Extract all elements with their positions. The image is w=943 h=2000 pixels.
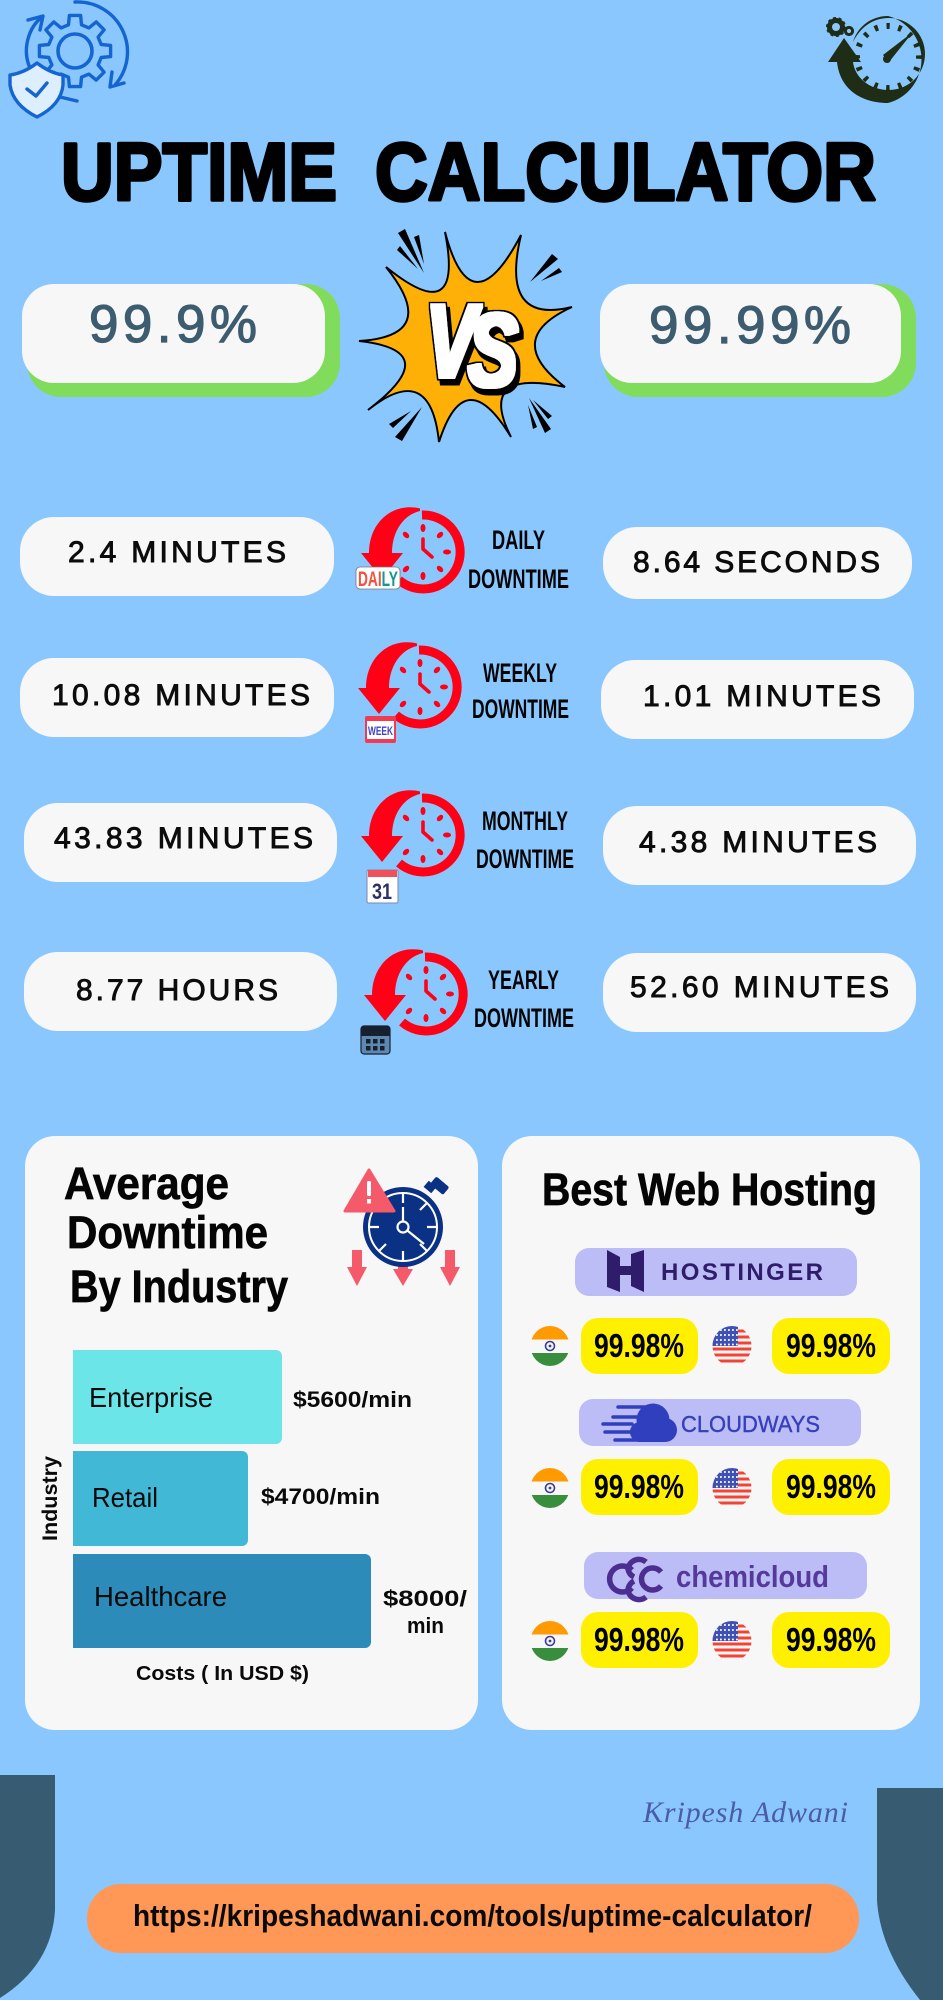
chip: india uptime: 99.98%	[594, 1468, 684, 1505]
panel: best web hosting	[502, 1136, 920, 1730]
logo: hostinger: HOSTINGER	[661, 1259, 823, 1286]
title: CALCULATOR	[375, 127, 876, 218]
label: monthly downtime: MONTHLY	[482, 806, 568, 836]
icon: weekly clock: WEEK	[368, 726, 394, 738]
label: yearly downtime: YEARLY	[488, 965, 559, 995]
chip: usa uptime: 99.98%	[786, 1468, 876, 1505]
icon: daily clock	[356, 507, 460, 591]
chip: usa uptime: 99.98%	[786, 1621, 876, 1658]
label: yearly downtime: DOWNTIME	[474, 1003, 574, 1033]
icon: VS burst	[359, 229, 572, 442]
icon: weekly clock	[358, 642, 457, 743]
chip: india uptime	[581, 1612, 698, 1668]
value: enterprise: $5600/min	[293, 1387, 412, 1412]
label: daily downtime: DAILY	[492, 525, 545, 555]
flag: india	[530, 1468, 570, 1508]
title: UPTIME	[61, 127, 337, 218]
row: daily downtime 99.9: 2.4 MINUTES	[68, 536, 286, 569]
label: monthly downtime: DOWNTIME	[476, 844, 574, 874]
bar chart	[39, 1350, 467, 1685]
bar: enterprise	[73, 1350, 282, 1444]
row: monthly downtime 99.99	[603, 806, 916, 885]
value: healthcare	[383, 1586, 467, 1638]
icon: monthly clock	[361, 790, 460, 904]
flag: india	[530, 1621, 570, 1661]
row: yearly downtime 99.9	[24, 952, 337, 1031]
logo: hostinger	[575, 1248, 857, 1296]
row: monthly downtime 99.9	[24, 803, 337, 882]
url button: https://kripeshadwani.com/tools/uptime-calculator/	[133, 1898, 812, 1933]
icon: VS burst: S	[468, 293, 518, 409]
row: weekly downtime 99.9	[20, 658, 334, 737]
label: daily downtime: DOWNTIME	[468, 564, 569, 594]
icon: yearly clock	[361, 949, 463, 1054]
label: monthly downtime	[476, 806, 574, 874]
chip: usa uptime: 99.98%	[786, 1327, 876, 1364]
title	[61, 127, 876, 218]
signature: Kripesh Adwani	[642, 1796, 848, 1829]
chip: india uptime	[581, 1459, 698, 1515]
row: weekly downtime 99.99	[601, 660, 914, 739]
flag: usa	[712, 1468, 752, 1508]
row: daily downtime 99.99: 8.64 SECONDS	[633, 546, 880, 579]
chip: india uptime: 99.98%	[594, 1327, 684, 1364]
value: healthcare: min	[407, 1613, 444, 1638]
value: healthcare: $8000/	[383, 1586, 467, 1611]
flag: india	[530, 1326, 570, 1366]
heading: average downtime by industry: Average	[64, 1158, 229, 1209]
row: yearly downtime 99.99	[603, 953, 916, 1032]
chip: usa uptime	[772, 1459, 890, 1515]
label: weekly downtime	[472, 658, 569, 724]
bar: healthcare	[73, 1554, 371, 1648]
icon: daily clock: DAILY	[358, 568, 398, 591]
card: 99.9%	[22, 284, 340, 397]
logo: chemicloud	[584, 1552, 867, 1600]
hosting row: hostinger uptime	[530, 1318, 890, 1374]
flag: usa	[712, 1621, 752, 1661]
bar: enterprise: Enterprise	[89, 1382, 213, 1413]
chip: india uptime	[581, 1318, 698, 1374]
axis label: costs: Costs ( In USD $)	[136, 1663, 309, 1685]
decorative corner: right	[877, 1788, 943, 2000]
chip: usa uptime	[772, 1612, 890, 1668]
card: 99.99%	[600, 284, 916, 397]
panel: average downtime by industry	[25, 1136, 478, 1730]
card: 99.9%: 99.9%	[89, 295, 257, 354]
row: daily downtime 99.9	[20, 517, 334, 596]
chip: usa uptime	[772, 1318, 890, 1374]
bar: retail	[73, 1451, 248, 1546]
label: weekly downtime: WEEKLY	[483, 658, 557, 688]
hosting row: chemicloud uptime	[530, 1612, 890, 1668]
axis label: industry: Industry	[39, 1456, 62, 1541]
row: daily downtime 99.99	[603, 527, 912, 599]
icon: speedometer with arrow and gears	[827, 16, 925, 103]
heading: average downtime by industry: Downtime	[67, 1207, 268, 1258]
icon: monthly clock: 31	[372, 879, 392, 904]
logo: chemicloud: chemicloud	[676, 1559, 829, 1594]
logo: cloudways	[579, 1399, 861, 1446]
decorative corner: left	[0, 1775, 55, 1998]
heading: best web hosting: Best Web Hosting	[542, 1164, 877, 1215]
row: monthly downtime 99.9: 43.83 MINUTES	[54, 822, 313, 855]
flag: usa	[712, 1326, 752, 1366]
row: weekly downtime 99.9: 10.08 MINUTES	[52, 679, 310, 712]
value: retail: $4700/min	[261, 1484, 380, 1509]
icon: VS burst: V	[426, 284, 481, 400]
icon: stopwatch with alert	[345, 1170, 460, 1286]
heading: average downtime by industry: By Industry	[70, 1261, 288, 1312]
card: 99.99%: 99.99%	[649, 296, 851, 355]
label: yearly downtime	[474, 965, 574, 1033]
bar: healthcare: Healthcare	[94, 1581, 227, 1612]
row: yearly downtime 99.9: 8.77 HOURS	[76, 974, 278, 1007]
chip: india uptime: 99.98%	[594, 1621, 684, 1658]
label: weekly downtime: DOWNTIME	[472, 694, 569, 724]
row: monthly downtime 99.99: 4.38 MINUTES	[639, 826, 877, 859]
logo: cloudways: CLOUDWAYS	[681, 1411, 820, 1437]
row: yearly downtime 99.99: 52.60 MINUTES	[630, 971, 889, 1004]
heading: average downtime by industry	[64, 1158, 288, 1312]
icon: gear with shield	[10, 2, 127, 117]
bar: retail: Retail	[92, 1482, 158, 1513]
label: daily downtime	[468, 525, 569, 594]
row: weekly downtime 99.99: 1.01 MINUTES	[643, 680, 881, 713]
hosting row: cloudways uptime	[530, 1459, 890, 1515]
url button	[87, 1884, 859, 1953]
